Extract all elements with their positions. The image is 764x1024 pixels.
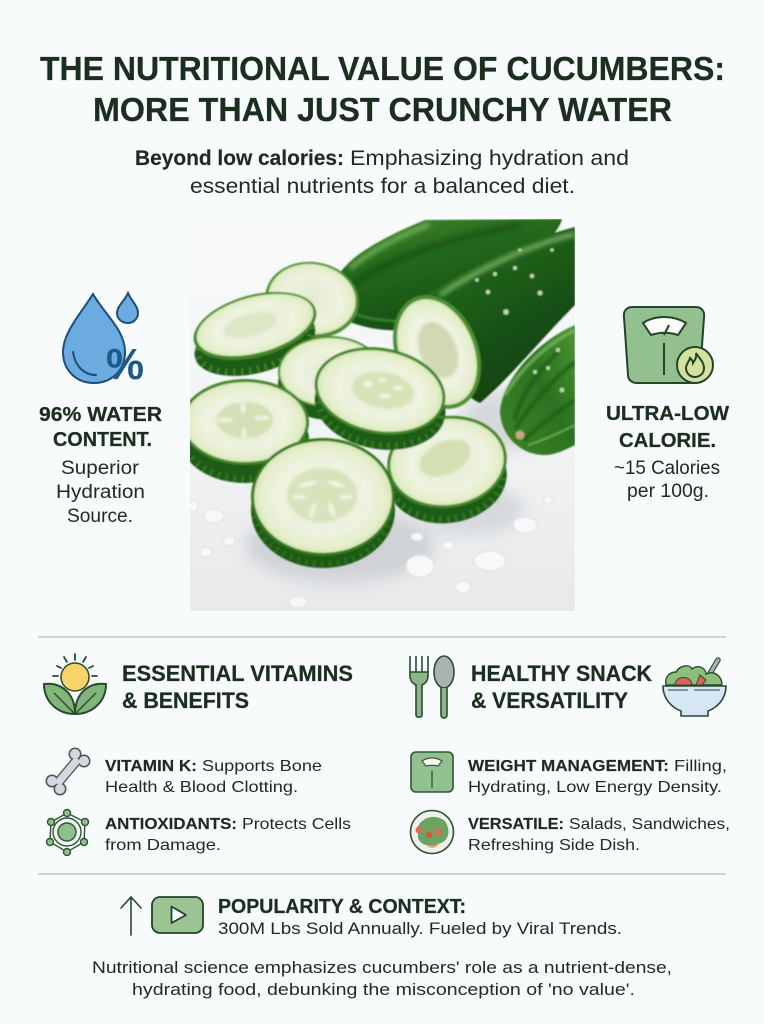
icon: water drop with percent	[63, 293, 144, 389]
text: weight management: Filling,	[674, 758, 727, 775]
panel: popularity	[121, 896, 622, 938]
panel: healthy snack	[410, 656, 730, 854]
heading: healthy snack and versatility: & VERSATILITY	[471, 688, 628, 713]
icon: water drop with percent: %	[106, 340, 144, 389]
slice: upper left	[192, 291, 318, 378]
footer note: Nutritional science emphasizes cucumbers' role as a nutrient-dense,	[92, 958, 672, 977]
title	[40, 50, 725, 128]
text: antioxidants: ANTIOXIDANTS:	[105, 816, 237, 833]
panel: essential vitamins	[44, 654, 353, 856]
icon: video play	[152, 897, 203, 933]
slice: right	[386, 414, 508, 524]
heading: popularity and context: POPULARITY & CONTEXT:	[218, 896, 466, 918]
whole cucumber: back	[333, 219, 562, 330]
heading: 96% water content	[39, 404, 163, 451]
heading: essential vitamins and benefits: & BENEFITS	[122, 688, 249, 713]
icon: sun and leaves	[44, 654, 106, 714]
text: calories per 100g: per 100g.	[627, 481, 709, 502]
heading: ultra-low calorie	[606, 403, 729, 452]
subtitle: Beyond low calories:	[135, 147, 344, 170]
whole cucumber: right	[500, 325, 575, 455]
heading: essential vitamins and benefits	[122, 661, 353, 713]
water droplets	[188, 496, 553, 608]
icon: small scale	[411, 752, 453, 792]
heading: ultra-low calorie: ULTRA-LOW	[606, 403, 729, 425]
text: popularity detail: 300M Lbs Sold Annually. Fueled by Viral Trends.	[218, 919, 622, 938]
footer note: hydrating food, debunking the misconception of 'no value'.	[132, 980, 635, 999]
text: superior hydration source: Superior	[61, 458, 140, 479]
heading: healthy snack and versatility	[471, 661, 652, 713]
icon: scale with flame	[624, 307, 713, 383]
stat: water content	[39, 293, 163, 527]
text: weight management: Hydrating, Low Energy Density.	[468, 779, 722, 796]
text: superior hydration source: Hydration	[56, 482, 145, 503]
slice: back	[264, 260, 360, 339]
text: weight management	[468, 758, 727, 796]
text: vitamin k: Supports Bone	[202, 758, 322, 775]
stat: ultra-low calorie	[606, 307, 729, 502]
slice: front large	[251, 438, 395, 568]
footer note	[92, 958, 672, 999]
subtitle: Emphasizing hydration and	[350, 147, 629, 170]
slice: middle behind	[278, 336, 382, 420]
text: calories per 100g: ~15 Calories	[614, 458, 720, 479]
text: vitamin k: VITAMIN K:	[105, 758, 197, 775]
subtitle	[135, 147, 629, 198]
text: vitamin k: Health & Blood Clotting.	[105, 779, 298, 796]
text: calories per 100g	[614, 458, 720, 502]
whole cucumber: cut	[392, 226, 575, 410]
heading: 96% water content: 96% WATER	[39, 404, 163, 426]
icon: salad plate	[410, 810, 454, 854]
icon: up arrow	[121, 897, 141, 935]
text: versatile: VERSATILE:	[468, 816, 564, 833]
text: antioxidants: Protects Cells	[242, 816, 351, 833]
heading: essential vitamins and benefits: ESSENTIAL VITAMINS	[122, 661, 353, 686]
icon: bone	[46, 748, 90, 796]
text: versatile	[468, 816, 730, 854]
heading: ultra-low calorie: CALORIE.	[619, 430, 716, 452]
heading: 96% water content: CONTENT.	[53, 429, 152, 451]
text: vitamin k	[105, 758, 322, 796]
subtitle: essential nutrients for a balanced diet.	[190, 175, 575, 198]
title: THE NUTRITIONAL VALUE OF CUCUMBERS:	[40, 50, 725, 87]
title: MORE THAN JUST CRUNCHY WATER	[93, 91, 672, 128]
text: superior hydration source: Source.	[67, 506, 133, 527]
slice: left	[181, 379, 309, 483]
text: superior hydration source	[56, 458, 145, 527]
text: weight management: WEIGHT MANAGEMENT:	[468, 758, 669, 775]
icon: fork and spoon	[410, 656, 454, 718]
heading: healthy snack and versatility: HEALTHY SNACK	[471, 661, 652, 686]
icon: salad bowl	[663, 660, 726, 716]
text: versatile: Salads, Sandwiches,	[569, 816, 730, 833]
cucumber photo	[181, 219, 575, 611]
icon: antioxidant molecule	[46, 810, 88, 856]
slice: front middle	[314, 346, 446, 451]
text: antioxidants	[105, 816, 351, 854]
text: antioxidants: from Damage.	[105, 837, 221, 854]
text: versatile: Refreshing Side Dish.	[468, 837, 640, 854]
